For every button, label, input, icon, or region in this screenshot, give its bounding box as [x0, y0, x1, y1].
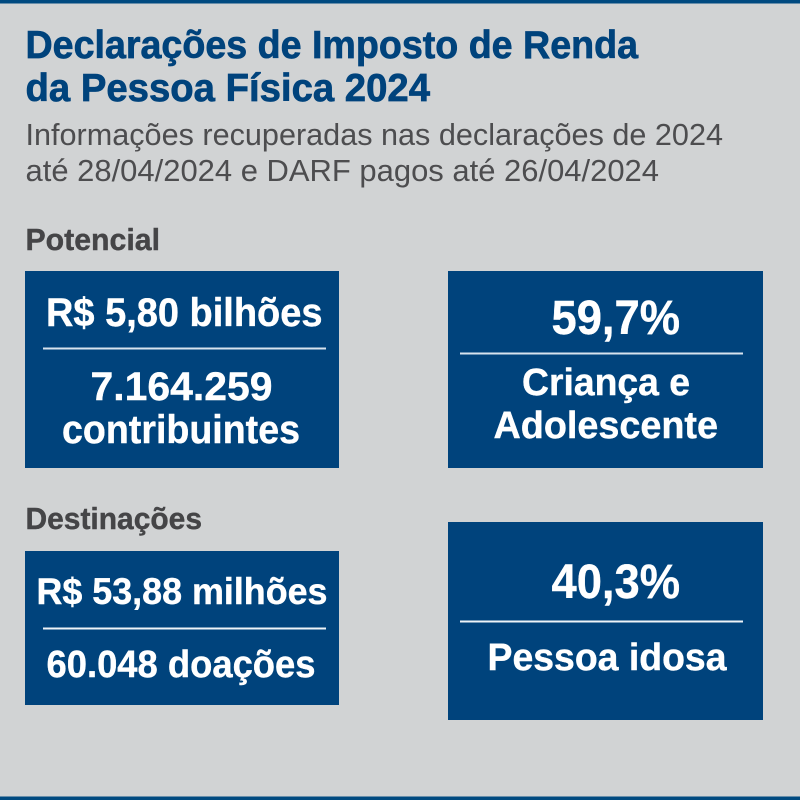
title	[26, 24, 638, 110]
label: Criança e Adolescente: Adolescente	[494, 405, 718, 447]
heading: Destinações: Destinações	[26, 501, 202, 536]
subtitle: Informações recuperadas nas declarações de 2024	[26, 117, 723, 152]
subtitle: até 28/04/2024 e DARF pagos até 26/04/2024	[26, 153, 659, 188]
value: 60.048 doações: 60.048 doações	[46, 644, 316, 686]
value: 40,3%: 40,3%	[552, 556, 680, 609]
panel: potencial	[25, 271, 339, 468]
value: R$ 5,80 bilhões: R$ 5,80 bilhões	[46, 291, 322, 335]
heading: Potencial: Potencial	[26, 222, 160, 257]
subtitle	[26, 117, 723, 188]
value: 7.164.259 contribuintes	[62, 365, 300, 452]
value: 7.164.259 contribuintes: contribuintes	[62, 408, 300, 452]
panel: destinações	[25, 551, 339, 705]
value: R$ 53,88 milhões: R$ 53,88 milhões	[36, 571, 328, 612]
title: da Pessoa Física 2024	[26, 67, 430, 110]
panel: pessoa idosa	[448, 522, 763, 720]
value: 59,7%: 59,7%	[552, 292, 680, 345]
title: Declarações de Imposto de Renda	[26, 24, 638, 67]
label: Criança e Adolescente: Criança e	[522, 362, 690, 404]
label: Pessoa idosa: Pessoa idosa	[488, 637, 727, 679]
label: Criança e Adolescente	[494, 362, 718, 447]
panel: criança e adolescente	[448, 271, 763, 468]
value: 7.164.259 contribuintes: 7.164.259	[90, 365, 272, 409]
